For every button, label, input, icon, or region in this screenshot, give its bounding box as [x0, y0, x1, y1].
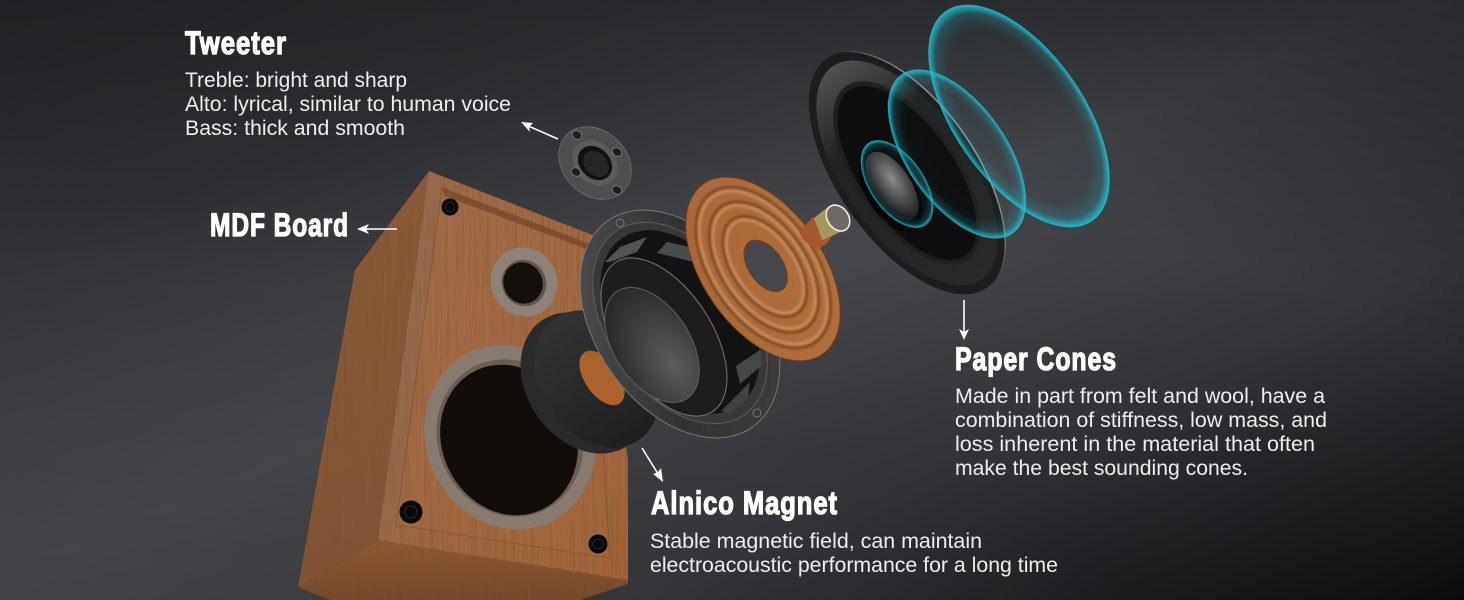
screw bottom-right: [588, 534, 608, 554]
cabinet front face: [378, 171, 628, 580]
magnet cup: [575, 236, 753, 438]
wave medium: [860, 46, 1054, 262]
heading: MDF board: MDF Board: [210, 207, 349, 243]
tweeter description: Alto: lyrical, similar to human voice: [185, 93, 511, 116]
paper cones description: [955, 385, 1327, 480]
paper cones description: Made in part from felt and wool, have a: [955, 385, 1325, 408]
paper cones description: combination of stiffness, low mass, and: [955, 409, 1327, 432]
woofer cone: [770, 19, 1044, 327]
inner panel groove: [396, 188, 610, 558]
small port: [479, 236, 569, 328]
basket window: top left: [605, 237, 647, 262]
arrow: alnico magnet: [642, 448, 663, 482]
text block: tweeter: [185, 25, 511, 140]
paper cone disc: [654, 149, 872, 389]
MDF speaker cabinet: [298, 171, 628, 600]
cabinet side face: [298, 171, 429, 587]
heading: tweeter: Tweeter: [185, 25, 287, 61]
paper cones description: make the best sounding cones.: [955, 457, 1248, 480]
text block: alnico magnet: [650, 485, 1058, 577]
basket window: bottom right: [721, 382, 750, 414]
cabinet bottom face: [298, 540, 628, 600]
heading: alnico magnet: Alnico Magnet: [651, 485, 838, 521]
large woofer port: [394, 316, 626, 558]
arrow: tweeter: [521, 122, 558, 139]
wave large: [892, 0, 1146, 258]
tweeter description: Treble: bright and sharp: [185, 69, 407, 92]
tweeter description: Bass: thick and smooth: [185, 117, 405, 140]
voice coil: [799, 201, 855, 250]
speaker frame basket: [539, 173, 821, 475]
paper cones description: loss inherent in the material that often: [955, 433, 1315, 456]
heading: paper cones: Paper Cones: [955, 341, 1117, 377]
cyan sound waves: [846, 0, 1146, 262]
text block: paper cones: [955, 341, 1327, 480]
alnico magnet description: Stable magnetic field, can maintain: [650, 530, 982, 553]
arrow: MDF board: [357, 224, 397, 234]
wave small: [846, 128, 948, 240]
basket window: lower right: [736, 350, 762, 384]
alnico magnet description: electroacoustic performance for a long time: [650, 554, 1058, 577]
tweeter description: [185, 69, 511, 140]
screw bottom-left: [400, 500, 422, 524]
dust cap dome: [846, 141, 935, 242]
screw top-left: [442, 198, 458, 216]
tweeter: [544, 112, 646, 214]
magnet ring: [494, 286, 685, 479]
arrow: paper cones: [959, 300, 969, 340]
alnico magnet description: [650, 530, 1058, 577]
basket window: top right: [657, 242, 694, 262]
